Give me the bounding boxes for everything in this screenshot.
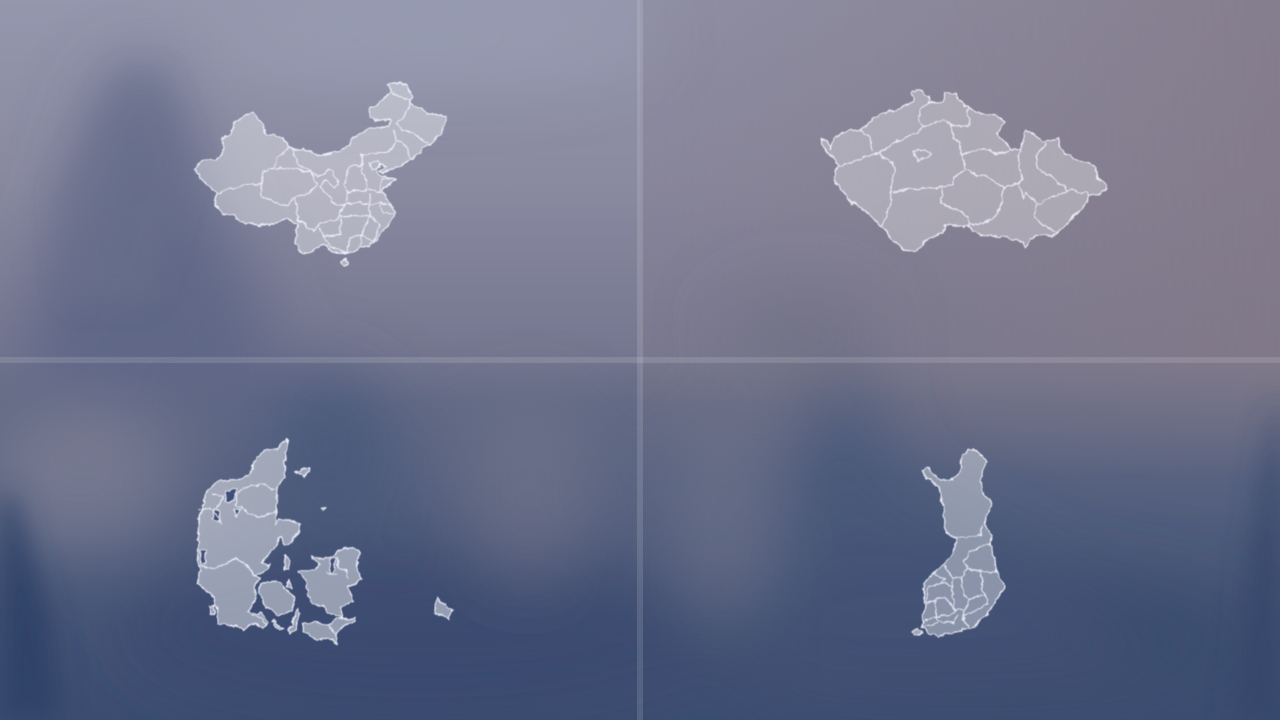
map: Denmark: [197, 439, 452, 645]
vertical panel divider: [637, 0, 643, 720]
map: Czech Republic: [822, 90, 1107, 252]
map: China: [195, 83, 447, 267]
map: Finland: [912, 449, 1005, 637]
horizontal panel divider: [0, 357, 1280, 363]
